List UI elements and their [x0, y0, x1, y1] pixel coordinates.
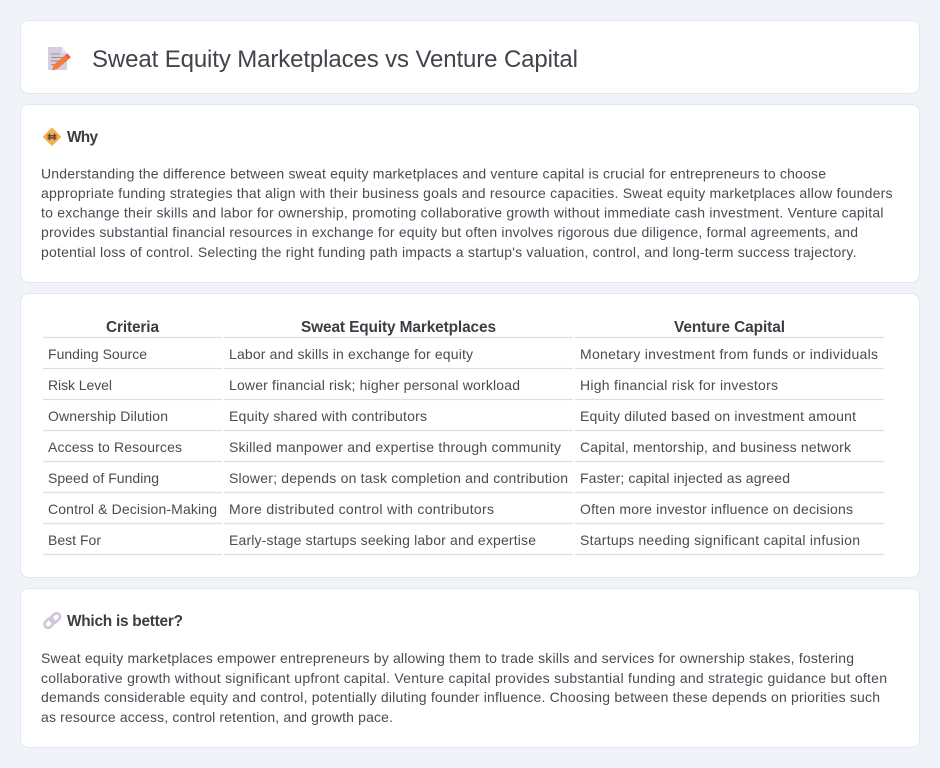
row: best for: Startups needing significant capital infusion	[580, 532, 860, 548]
row: speed of funding: Speed of Funding	[48, 470, 159, 486]
icon: document with pencil	[48, 47, 71, 70]
panel: title header	[20, 20, 920, 94]
text block: which paragraph: collaborative growth without significant upfront capital. Venture capital provides substantial funding and strategic guidance but often	[41, 670, 887, 686]
row: risk level: Risk Level	[48, 377, 112, 393]
row: best for	[48, 532, 860, 548]
row: funding source	[48, 346, 878, 362]
icon: diamond sign	[44, 128, 60, 145]
table header: Criteria	[106, 319, 159, 336]
table header: Venture Capital	[674, 319, 785, 336]
row: control and decision-making: Control & Decision-Making	[48, 501, 217, 517]
text block: why paragraph: Understanding the difference between sweat equity marketplaces and venture capital is crucial for entrepreneurs to choose	[41, 166, 826, 182]
row: best for: Best For	[48, 532, 101, 548]
row: ownership dilution: Equity shared with contributors	[229, 408, 427, 424]
panel: which is better	[20, 588, 920, 748]
heading: which is better: Which is better?	[67, 613, 183, 630]
heading: why: Why	[67, 129, 98, 146]
row: funding source: Labor and skills in exchange for equity	[229, 346, 473, 362]
row: risk level	[48, 377, 778, 393]
row: risk level: Lower financial risk; higher personal workload	[229, 377, 520, 393]
text block: why paragraph: potential loss of control. Selecting the right funding path impacts a startup's valuation, control, and long-term success trajectory.	[41, 244, 857, 260]
row: access to resources: Access to Resources	[48, 439, 182, 455]
row: funding source: Funding Source	[48, 346, 147, 362]
row: speed of funding: Slower; depends on task completion and contribution	[229, 470, 568, 486]
row: ownership dilution	[48, 408, 856, 424]
row: control and decision-making: More distributed control with contributors	[229, 501, 494, 517]
text block: why paragraph: to exchange their skills and labor for ownership, promoting collaborative growth without immediate cash investment. Venture capital	[41, 204, 884, 220]
panel: comparison table	[20, 294, 920, 578]
text block: which paragraph: Sweat equity marketplaces empower entrepreneurs by allowing them to trade skills and services for ownership stakes, fostering	[41, 650, 854, 666]
row: speed of funding: Faster; capital injected as agreed	[580, 470, 790, 486]
text block: why paragraph: provides substantial financial resources in exchange for equity but often involves rigorous due diligence, formal agreements, and	[41, 224, 858, 240]
row: control and decision-making: Often more investor influence on decisions	[580, 501, 853, 517]
row: risk level: High financial risk for investors	[580, 377, 778, 393]
row: access to resources: Capital, mentorship, and business network	[580, 439, 852, 455]
text block: which paragraph: as resource access, control retention, and growth pace.	[41, 709, 393, 725]
row: control and decision-making	[48, 501, 853, 517]
row: funding source: Monetary investment from funds or individuals	[580, 346, 878, 362]
icon: link	[43, 612, 61, 629]
row: ownership dilution: Ownership Dilution	[48, 408, 168, 424]
panel: why	[20, 104, 920, 282]
row: best for: Early-stage startups seeking labor and expertise	[229, 532, 536, 548]
text block: which paragraph	[41, 650, 887, 725]
text block: why paragraph	[41, 166, 892, 260]
table header: Sweat Equity Marketplaces	[301, 319, 496, 336]
row: speed of funding	[48, 470, 790, 486]
text block: why paragraph: appropriate funding strategies that align with their business goals and resource capacities. Sweat equity marketplaces allow founders	[41, 185, 892, 201]
row: access to resources: Skilled manpower and expertise through community	[229, 439, 561, 455]
title: Sweat Equity Marketplaces vs Venture Capital	[92, 46, 578, 73]
text block: which paragraph: demands considerable equity and control, potentially diluting founder influence. Choosing between these depends on priorities such	[41, 689, 880, 705]
row: access to resources	[48, 439, 852, 455]
table header	[106, 319, 785, 336]
row: ownership dilution: Equity diluted based on investment amount	[580, 408, 856, 424]
